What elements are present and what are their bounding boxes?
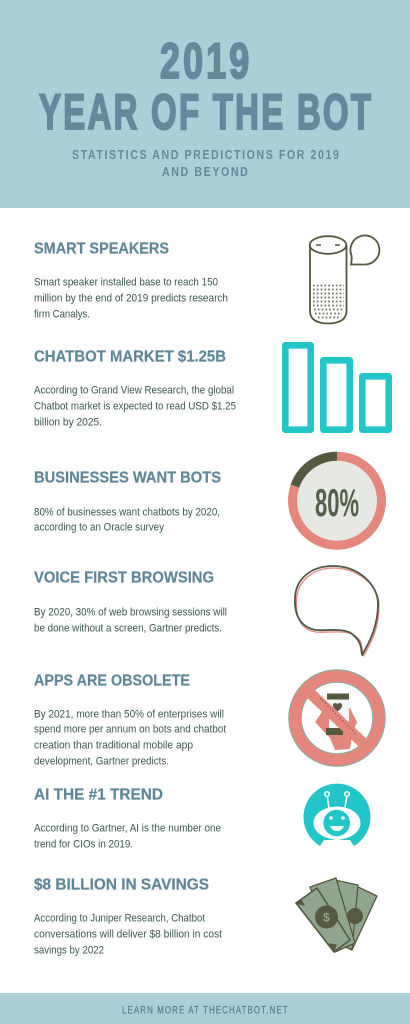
- icon: no phones sign: [295, 676, 379, 760]
- section: businesses want bots: 80% of businesses want chatbots by 2020,: [34, 506, 220, 518]
- icon: speech bubble: [295, 566, 379, 656]
- section: chatbot market: [34, 348, 236, 428]
- section: apps are obsolete: creation than traditional mobile app: [34, 740, 193, 752]
- section: chatbot market: CHATBOT MARKET $1.25B: [34, 348, 226, 366]
- section: apps are obsolete: [34, 672, 226, 768]
- section: smart speakers: firm Canalys.: [34, 308, 90, 320]
- section: apps are obsolete: APPS ARE OBSOLETE: [34, 672, 190, 690]
- section: apps are obsolete: By 2021, more than 50% of enterprises will: [34, 708, 224, 720]
- section: $8 billion in savings: conversations will deliver $8 billion in cost: [34, 928, 222, 940]
- section: smart speakers: Smart speaker installed base to reach 150: [34, 276, 218, 288]
- icon: money bills: [296, 878, 377, 952]
- section: $8 billion in savings: $8 BILLION IN SAVINGS: [34, 876, 209, 894]
- section: businesses want bots: according to an Oracle survey: [34, 522, 165, 534]
- section: smart speakers: million by the end of 2019 predicts research: [34, 292, 228, 304]
- section: $8 billion in savings: According to Juniper Research, Chatbot: [34, 912, 205, 924]
- subtitle: [72, 148, 339, 179]
- icon: 80% donut: [292, 456, 382, 545]
- section: chatbot market: According to Grand View Research, the global: [34, 384, 234, 396]
- panel: footer: [0, 993, 410, 1024]
- section: voice first browsing: [34, 570, 227, 634]
- section: smart speakers: SMART SPEAKERS: [34, 240, 169, 258]
- section: voice first browsing: By 2020, 30% of web browsing sessions will: [34, 606, 227, 618]
- section: apps are obsolete: spend more per annum on bots and chatbot: [34, 724, 226, 736]
- section: voice first browsing: be done without a screen, Gartner predicts.: [34, 622, 222, 634]
- section: ai the #1 trend: trend for CIOs in 2019.: [34, 838, 133, 850]
- section: voice first browsing: VOICE FIRST BROWSING: [34, 570, 214, 586]
- icon: bar chart: [285, 345, 389, 430]
- section: ai the #1 trend: According to Gartner, AI is the number one: [34, 822, 221, 834]
- section: ai the #1 trend: AI THE #1 TREND: [34, 786, 163, 804]
- section: businesses want bots: BUSINESSES WANT BOTS: [34, 470, 221, 486]
- icon: money bills: $: [323, 910, 330, 924]
- section: smart speakers: [34, 240, 228, 320]
- section: chatbot market: Chatbot market is expected to read USD $1.25: [34, 400, 236, 412]
- section: apps are obsolete: development, Gartner predicts.: [34, 756, 169, 768]
- footer link text: LEARN MORE AT THECHATBOT.NET: [122, 1004, 288, 1017]
- subtitle: STATISTICS AND PREDICTIONS FOR 2019: [72, 148, 339, 162]
- icon: 80% donut: 80%: [315, 482, 359, 525]
- section: businesses want bots: [34, 470, 221, 534]
- icon: robot: [303, 784, 370, 848]
- section: $8 billion in savings: savings by 2022: [34, 944, 104, 956]
- title: 2019: 2019: [160, 34, 249, 89]
- panel: header: [0, 0, 410, 208]
- section: ai the #1 trend: [34, 786, 221, 850]
- section: $8 billion in savings: [34, 876, 222, 956]
- section: chatbot market: billion by 2025.: [34, 416, 102, 428]
- subtitle: AND BEYOND: [162, 165, 248, 179]
- icon: smart speaker: [310, 236, 379, 324]
- title: year of the bot: YEAR OF THE BOT: [39, 84, 371, 140]
